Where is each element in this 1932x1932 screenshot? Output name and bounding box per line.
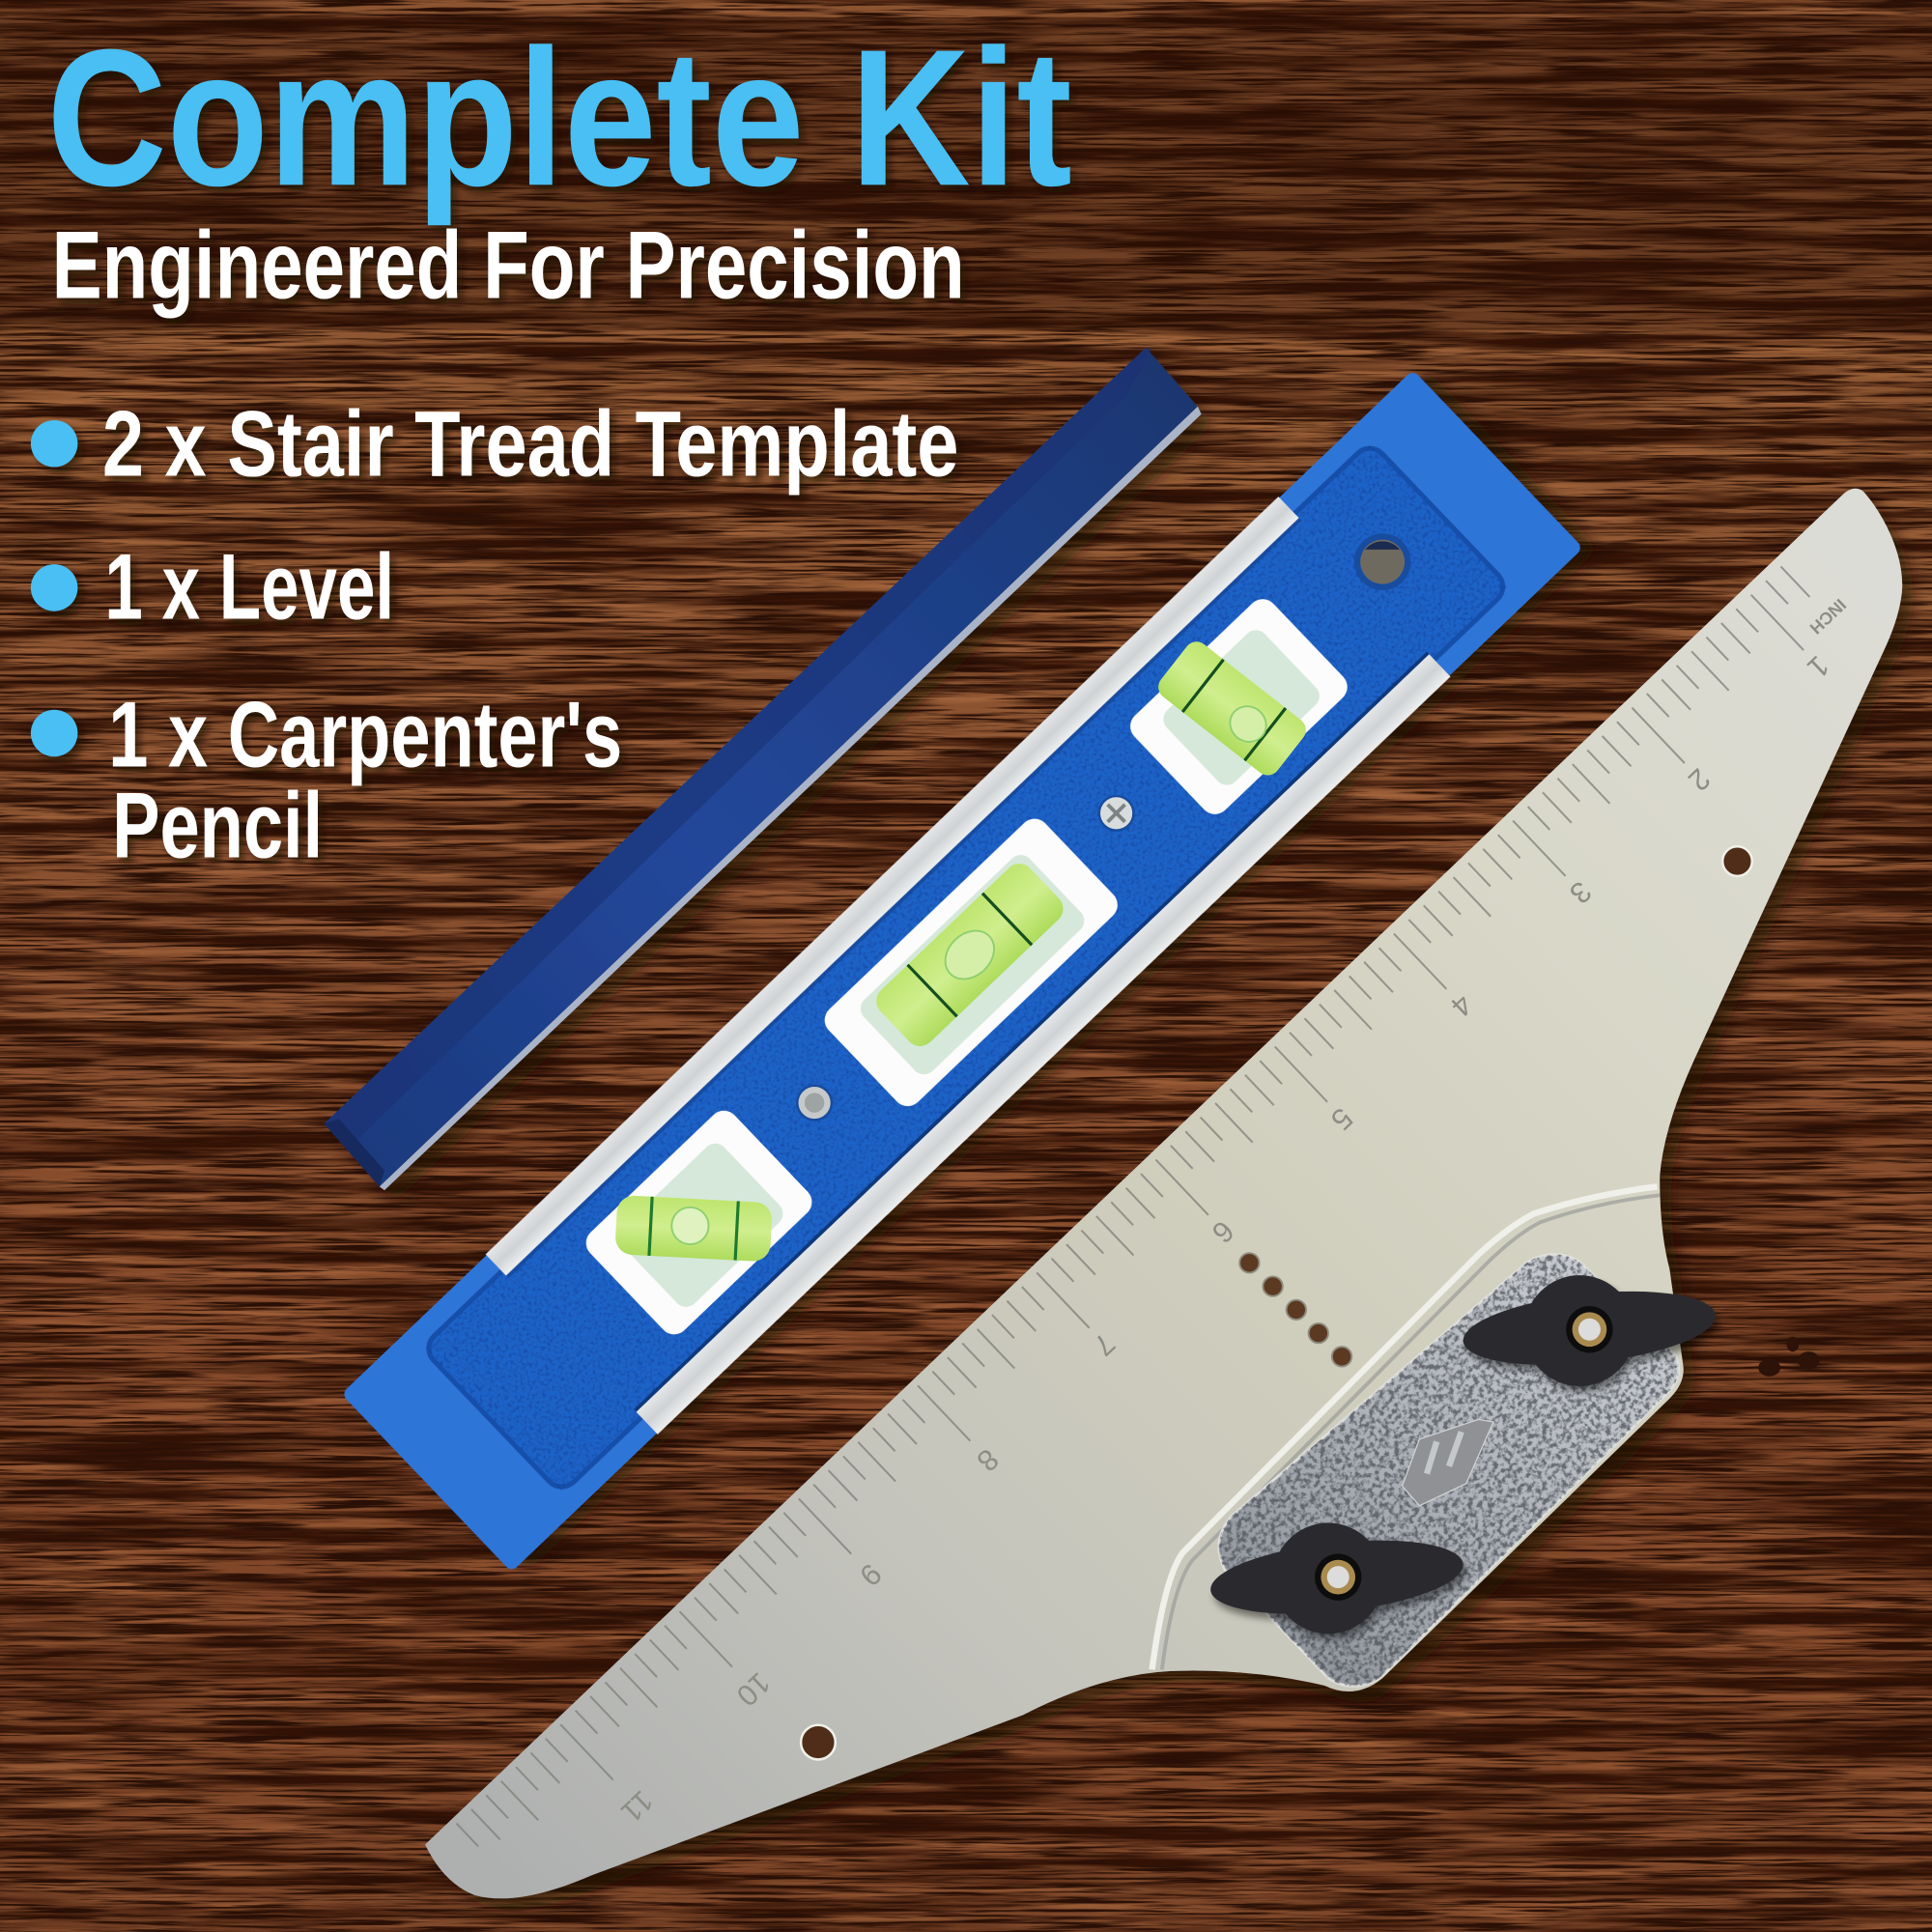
bullet dot 1 (31, 420, 77, 467)
logo mark (1403, 1419, 1493, 1506)
screw upper (1099, 796, 1133, 831)
window center (818, 812, 1123, 1112)
ruler numbers (589, 595, 1885, 1829)
title: Complete Kit (46, 9, 1072, 226)
window right (1124, 593, 1353, 820)
ruler numbers: 2 (1682, 762, 1717, 797)
carpenter's pencil (324, 348, 1202, 1190)
screw lower (797, 1086, 832, 1120)
ruler numbers: 4 (1444, 987, 1479, 1023)
vial center (870, 858, 1069, 1052)
bottom rail (637, 654, 1450, 1435)
ruler numbers: 6 (1206, 1214, 1240, 1249)
window left (580, 1104, 818, 1341)
mounting hole bottom (801, 1725, 836, 1759)
item: carpenter's pencil: Pencil (112, 773, 323, 878)
row of adjustment holes (1239, 1253, 1351, 1367)
wing knob lower (1208, 1523, 1466, 1634)
ruler numbers: 9 (853, 1557, 888, 1592)
ruler numbers: 8 (970, 1442, 1005, 1478)
ruler numbers: 7 (1087, 1327, 1122, 1362)
mounting hole top (1722, 846, 1752, 876)
bullet dot 3 (31, 710, 77, 756)
item: carpenter's pencil: 1 x Carpenter's (108, 681, 622, 786)
bullet list (31, 390, 958, 878)
ruler numbers: 10 (730, 1666, 777, 1713)
ruler numbers: 11 (614, 1784, 660, 1829)
vial right (1153, 637, 1311, 781)
level body (340, 369, 1584, 1573)
clamp plate (1217, 1253, 1681, 1688)
top rail (486, 497, 1299, 1276)
item: carpenter's pencil (108, 681, 622, 878)
ruler numbers: INCH (1806, 595, 1850, 638)
wood knot (1758, 1337, 1820, 1377)
template body (425, 489, 1902, 1898)
ruler numbers: 3 (1563, 875, 1598, 910)
vial left (614, 1195, 773, 1262)
spirit level (340, 369, 1584, 1573)
item: level: 1 x Level (104, 533, 394, 639)
item: stair tread template: 2 x Stair Tread Template (102, 390, 958, 496)
bullet dot 2 (31, 564, 77, 611)
wing knob upper (1460, 1275, 1719, 1386)
level hanging hole (1354, 533, 1410, 590)
ruler numbers: 5 (1324, 1101, 1359, 1136)
fold line (1152, 1186, 1658, 1669)
stair tread template (425, 489, 1902, 1925)
ruler numbers: 1 (1801, 649, 1835, 684)
subtitle: Engineered For Precision (52, 213, 965, 320)
ruler edge ticks and numbers (458, 564, 1885, 1925)
